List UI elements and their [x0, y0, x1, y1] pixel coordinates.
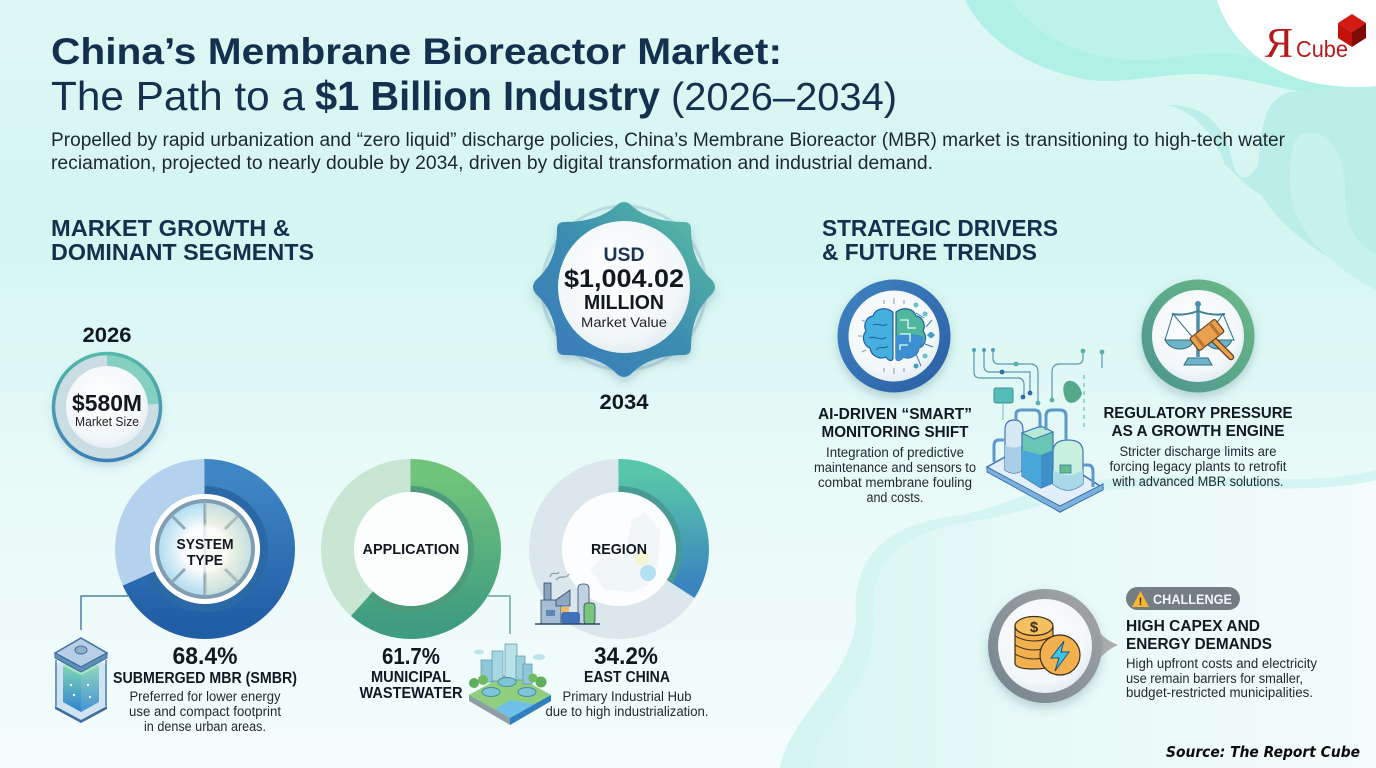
title: (2026–2034) — [671, 76, 897, 119]
donut: application: APPLICATION — [362, 541, 460, 558]
text: municipal wastewater: WASTEWATER — [360, 685, 463, 702]
subtitle — [51, 130, 1286, 174]
title: The Path to a — [51, 73, 305, 119]
text: AI-driven monitoring: Integration of predictive — [826, 445, 964, 460]
logo — [1217, 0, 1376, 87]
text: regulatory pressure: AS A GROWTH ENGINE — [1112, 423, 1285, 440]
icon: MBR plant with circuits — [972, 348, 1104, 512]
heading: strategic drivers: STRATEGIC DRIVERS — [822, 215, 1058, 241]
donut: system type — [132, 476, 278, 622]
text: municipal wastewater — [360, 643, 463, 702]
text: submerged MBR: use and compact footprint — [129, 704, 281, 719]
subtitle: reciamation, projected to nearly double by 2034, driven by digital transformation and industrial demand. — [51, 153, 933, 174]
text: AI-driven monitoring: combat membrane fouling — [818, 475, 972, 490]
text: high capex: ENERGY DEMANDS — [1126, 636, 1272, 653]
text: AI-driven monitoring: MONITORING SHIFT — [822, 424, 969, 441]
text: regulatory pressure — [1104, 405, 1293, 489]
text: regulatory pressure: Stricter discharge limits are — [1120, 444, 1276, 459]
heading: market growth — [51, 215, 314, 265]
text: AI-driven monitoring: maintenance and sensors to — [814, 460, 976, 475]
text: AI-driven monitoring: and costs. — [866, 490, 924, 505]
badge: 2034 market value: $1,004.02 — [564, 265, 684, 293]
icon: AI brain — [838, 280, 950, 392]
text: high capex — [1126, 618, 1317, 700]
title — [51, 31, 897, 119]
text: east china: due to high industrialization. — [546, 704, 708, 719]
2026 market size: 2026 — [82, 324, 132, 347]
logo: Cube — [1296, 36, 1348, 62]
2026 market size: $580M — [72, 390, 142, 416]
donut: system type: TYPE — [187, 552, 223, 569]
logo: Я — [1265, 21, 1293, 67]
challenge pill: CHALLENGE — [1153, 591, 1232, 607]
text: east china: Primary Industrial Hub — [562, 689, 692, 704]
subtitle: Propelled by rapid urbanization and “zero liquid” discharge policies, China’s Membrane Bioreactor (MBR) market is transitioning to high-tech water — [51, 130, 1286, 151]
icon: city and treatment plant — [469, 644, 551, 725]
text: submerged MBR: Preferred for lower energy — [130, 689, 281, 704]
text: municipal wastewater: 61.7% — [382, 643, 440, 669]
challenge pill — [1126, 587, 1240, 610]
badge: 2034 market value — [533, 202, 715, 414]
text: regulatory pressure: with advanced MBR solutions. — [1112, 474, 1284, 489]
challenge pill: ! — [1139, 596, 1142, 608]
badge: 2034 market value: 2034 — [600, 391, 649, 414]
text: high capex: HIGH CAPEX AND — [1126, 618, 1260, 635]
text: east china — [546, 643, 708, 719]
heading: strategic drivers — [822, 215, 1058, 265]
donut: system type: SYSTEM — [176, 536, 234, 553]
text: municipal wastewater: MUNICIPAL — [371, 669, 451, 686]
badge: 2034 market value: Market Value — [581, 314, 667, 330]
text: high capex: budget-restricted municipalities. — [1126, 685, 1313, 700]
text: submerged MBR: in dense urban areas. — [144, 719, 266, 734]
heading: strategic drivers: & FUTURE TRENDS — [822, 239, 1037, 265]
heading: market growth: MARKET GROWTH & — [51, 215, 290, 241]
title: $1 Billion Industry — [315, 73, 660, 119]
donut: region — [546, 476, 692, 622]
2026 market size: Market Size — [75, 415, 139, 429]
text: AI-driven monitoring: AI-DRIVEN “SMART” — [818, 406, 972, 423]
text: east china: 34.2% — [594, 643, 658, 670]
text: east china: EAST CHINA — [584, 669, 670, 686]
icon: factory — [535, 572, 600, 624]
title: China’s Membrane Bioreactor Market: — [51, 31, 782, 72]
text: submerged MBR — [113, 643, 297, 734]
badge: 2034 market value: MILLION — [584, 292, 664, 314]
text: regulatory pressure: forcing legacy plants to retrofit — [1110, 459, 1287, 474]
text: high capex: High upfront costs and electricity — [1126, 656, 1317, 671]
connector: application to city — [488, 596, 510, 634]
heading: market growth: DOMINANT SEGMENTS — [51, 239, 314, 265]
donut: application — [338, 476, 484, 622]
text: high capex: use remain barriers for smaller, — [1126, 671, 1303, 686]
text: regulatory pressure: REGULATORY PRESSURE — [1104, 405, 1293, 422]
icon: coins and energy — [988, 589, 1118, 703]
2026 market size — [54, 324, 160, 460]
text: submerged MBR: 68.4% — [172, 643, 238, 670]
icon: membrane tank — [55, 638, 107, 723]
icon: coins and energy: $ — [1030, 619, 1039, 636]
badge: 2034 market value: USD — [604, 245, 644, 266]
icon: scales and gavel — [1142, 280, 1254, 392]
text: AI-driven monitoring — [814, 406, 976, 505]
connector: system type to tank — [81, 596, 128, 630]
text: submerged MBR: SUBMERGED MBR (SMBR) — [113, 670, 297, 687]
source: Source: The Report Cube — [1166, 743, 1360, 761]
donut: region: REGION — [591, 541, 647, 558]
